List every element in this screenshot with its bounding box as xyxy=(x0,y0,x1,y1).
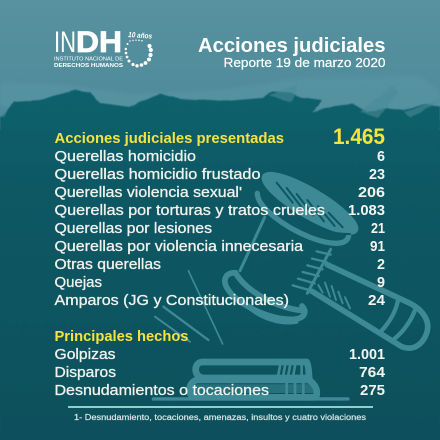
title: Acciones judiciales xyxy=(198,35,386,57)
row values: 764 xyxy=(359,364,386,381)
logo: dotted ring xyxy=(125,40,153,68)
row labels: Querellas por violencia innecesaria xyxy=(54,239,304,255)
row values: 9 xyxy=(377,274,385,291)
row values: 2 xyxy=(377,256,385,273)
row labels: Querellas violencia sexual' xyxy=(54,185,242,201)
footnote rule xyxy=(68,406,373,408)
row labels: Otras querellas xyxy=(54,257,161,273)
logo wordmark: IN xyxy=(54,26,76,59)
background: brush wash highlights xyxy=(0,76,440,110)
gavel head upper cap xyxy=(257,165,363,243)
row values: 1.001 xyxy=(349,346,385,363)
row labels: Golpizas xyxy=(54,347,116,363)
sound block xyxy=(153,362,348,399)
background: dark brush panel xyxy=(0,90,440,440)
logo wordmark: DH xyxy=(76,26,122,59)
logo subtitle: DERECHOS HUMANOS xyxy=(54,63,123,69)
row values: 24 xyxy=(368,292,386,309)
row values xyxy=(349,346,386,399)
row values xyxy=(348,148,386,309)
row labels: Querellas por lesiones xyxy=(54,221,212,237)
heading: Principales hechos xyxy=(54,329,188,345)
row labels xyxy=(54,347,269,399)
row labels: Querellas homicidio xyxy=(54,149,196,165)
row values: 1.083 xyxy=(348,202,385,219)
logo subtitle: INSTITUTO NACIONAL DE xyxy=(54,56,123,62)
logo: INDH xyxy=(54,26,153,69)
footnote: 1- Desnudamiento, tocaciones, amenazas, insultos y cuatro violaciones xyxy=(74,413,366,422)
row labels: Quejas xyxy=(54,275,102,291)
total number: 1.465 xyxy=(333,124,385,149)
icon: gavel and sound block xyxy=(153,165,428,399)
row labels: Querellas por torturas y tratos crueles xyxy=(54,203,325,219)
motion rays xyxy=(155,271,223,344)
logo wordmark xyxy=(54,26,122,59)
row values: 6 xyxy=(377,148,385,165)
heading row: Acciones judiciales presentadas xyxy=(54,131,284,147)
section: acciones judiciales presentadas xyxy=(54,124,386,309)
row values: 91 xyxy=(370,238,385,255)
row values: 23 xyxy=(369,166,385,183)
row labels: Desnudamientos o tocaciones xyxy=(54,383,269,399)
logo subtitle xyxy=(54,56,123,69)
gavel head body xyxy=(240,217,331,293)
row labels: Disparos xyxy=(54,365,116,381)
gavel handle xyxy=(312,265,428,348)
background: dry brush streaks xyxy=(0,84,436,118)
logo: 10 años mark: 10 años xyxy=(128,30,152,41)
subtitle: Reporte 19 de marzo 2020 xyxy=(224,56,386,70)
section: principales hechos xyxy=(54,329,386,399)
row labels: Amparos (JG y Constitucionales) xyxy=(54,293,289,309)
background: sky wash xyxy=(0,0,440,130)
row labels: Querellas homicidio frustado xyxy=(54,167,260,183)
row values: 21 xyxy=(371,220,385,237)
row labels xyxy=(54,149,325,309)
row values: 206 xyxy=(358,184,385,201)
gavel head lower cap xyxy=(225,273,305,323)
row values: 275 xyxy=(360,382,385,399)
